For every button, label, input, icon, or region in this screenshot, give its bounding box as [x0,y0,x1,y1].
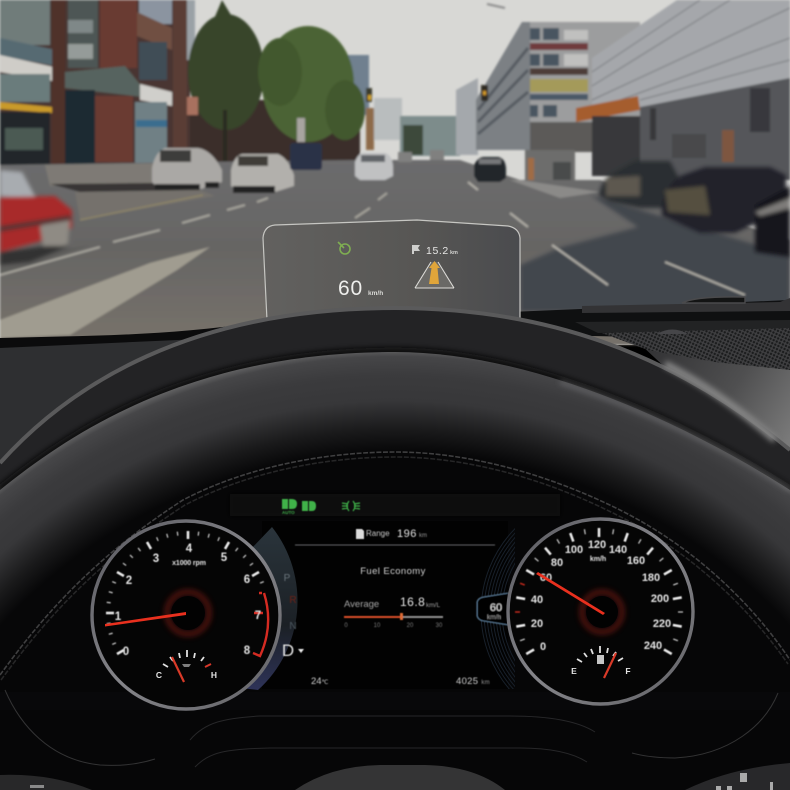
speedometer numbers: 140 [609,544,627,556]
icon: low beam [302,501,316,511]
speed limit callout: 60 [490,602,502,614]
speedometer numbers: 220 [653,618,671,630]
speedometer numbers [531,539,671,653]
right-hand buildings [400,0,790,182]
left brick building [0,0,195,170]
speedometer numbers: 200 [651,593,669,605]
tachometer ticks [106,531,264,654]
speedometer numbers: 160 [627,555,645,567]
street scene photo [0,0,790,345]
tachometer numbers: 4 [186,543,193,555]
tachometer hub and needle [105,592,209,634]
HUD navigation distance: km [450,250,458,256]
tachometer numbers: 2 [126,575,132,587]
speedometer ticks [515,528,683,654]
range row: 196 [397,528,417,540]
speedometer numbers: 40 [531,594,543,606]
average fuel economy bar: 0 [344,623,348,629]
odometer: 4025 km [456,676,490,687]
bottom hub and stalks [0,763,790,790]
tachometer numbers: 0 [123,646,129,658]
range row [295,528,495,546]
left dashboard surface [0,339,200,480]
average fuel economy bar: 10 [374,623,381,629]
road surface [0,160,790,345]
engine temperature gauge [156,650,217,682]
speedometer numbers: 60 [540,572,552,584]
average fuel economy bar: Average [344,599,379,610]
average fuel economy bar [344,595,443,629]
speaker grille [602,328,790,370]
warning lights [282,499,360,515]
speed limit ladder [481,528,515,689]
tachometer numbers: 8 [244,645,251,657]
center information display [282,528,495,687]
speedometer numbers: 20 [531,618,543,630]
range row: Range [366,529,390,538]
speedometer numbers: km/h [590,556,606,563]
speedometer numbers: 100 [565,544,583,556]
speedometer [508,519,693,704]
icon: auto headlight: AUTO [282,510,295,515]
center display background [262,521,508,689]
steering wheel rim [0,352,790,790]
fuel gauge: E [571,666,577,676]
average fuel economy bar: 16.8 [400,595,425,609]
gear selector band [240,527,298,690]
average fuel economy bar: km/L [426,602,440,609]
wheel stitching and binnacle [0,452,790,790]
gear letters: D [282,641,294,660]
head-up display panel [263,220,520,320]
gear letters: P [284,573,291,584]
head-up display panel: km/h [368,290,383,297]
gear letters: N [289,621,297,632]
HUD cruise icon [338,242,350,254]
fuel economy heading: Fuel Economy [360,566,426,577]
engine temperature gauge: H [211,670,217,680]
right dashboard surface [640,344,790,470]
range row: km [419,533,427,539]
gear letters [282,573,304,660]
average fuel economy bar: 30 [436,623,443,629]
tachometer numbers: 1 [115,611,122,623]
speed limit callout [477,593,508,625]
engine temperature gauge: C [156,670,162,680]
tachometer numbers: x1000 rpm [172,560,206,567]
tachometer numbers: 3 [153,553,159,565]
speedometer numbers: 0 [540,641,546,653]
tachometer [92,521,280,709]
speedometer numbers: 180 [642,572,660,584]
speedometer numbers: 120 [588,539,606,551]
speed limit callout: km/h [487,614,501,621]
icon: fog lights [342,501,360,511]
background sky [0,0,790,345]
HUD navigation distance: 15.2 [426,245,449,257]
HUD lane guidance arrow [415,261,454,288]
speedometer numbers: 80 [551,557,563,569]
windshield base and wipers [0,297,790,350]
speedometer hub and needle [536,572,622,632]
tachometer numbers: 7 [255,610,261,622]
HUD speed readout: 60 [338,277,363,300]
tachometer numbers: 5 [221,552,228,564]
outside temperature: 24℃ [311,676,329,687]
fuel gauge: F [625,666,631,676]
parked and passing cars [0,143,790,265]
tachometer numbers: 6 [244,574,250,586]
tachometer redline [253,593,268,656]
average fuel economy bar: 20 [407,623,414,629]
fuel gauge [571,646,631,678]
tachometer numbers [115,543,261,658]
gear letters: R [289,595,297,606]
speedometer numbers: 240 [644,640,662,652]
dashboard cowl [0,308,790,520]
trees and far buildings [187,0,402,170]
HUD navigation distance [412,245,458,257]
